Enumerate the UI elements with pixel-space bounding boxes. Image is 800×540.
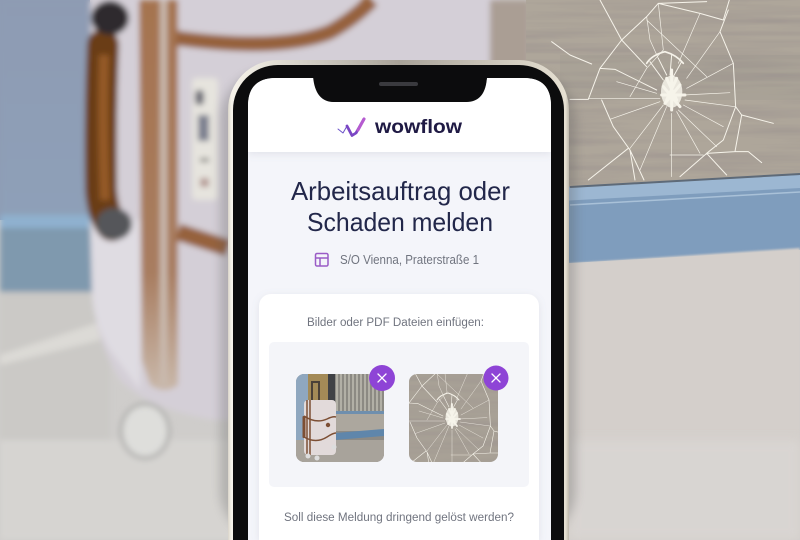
logo wordmark: wowflow (374, 116, 463, 138)
upload label: Bilder oder PDF Dateien einfügen: (307, 317, 484, 329)
mini suitcase (304, 400, 336, 455)
shadow beside phone (220, 70, 576, 540)
speaker grille (379, 82, 418, 86)
remove button 2 (484, 366, 508, 390)
light floor (560, 248, 800, 540)
location text: S/O Vienna, Praterstraße 1 (340, 253, 479, 267)
phone black bezel (233, 65, 564, 540)
logo mark (338, 119, 364, 136)
location line (316, 253, 479, 267)
header bar (248, 78, 551, 152)
wowflow logo (338, 116, 463, 138)
phone notch (313, 76, 487, 102)
blue skirting board (526, 174, 800, 263)
thumbnail: cracked glass photo (409, 374, 498, 462)
upload area (269, 342, 529, 487)
remove button 1 (369, 365, 395, 391)
phone mockup (220, 60, 576, 540)
blurred luggage handle (101, 45, 112, 225)
heading (291, 181, 510, 232)
heading: Schaden melden (307, 207, 493, 237)
blurred suitcase body (90, 0, 495, 420)
form card (259, 294, 539, 540)
phone screen (248, 78, 551, 540)
urgency question: Soll diese Meldung dringend gelöst werden? (284, 512, 514, 524)
background photo: wooden floor with cracked glass (526, 0, 800, 540)
thumbnail: suitcase photo (296, 374, 384, 462)
heading: Arbeitsauftrag oder (291, 176, 510, 206)
cracked glass (552, 0, 773, 180)
phone metal frame (228, 60, 569, 540)
icon: building layout (316, 254, 328, 266)
